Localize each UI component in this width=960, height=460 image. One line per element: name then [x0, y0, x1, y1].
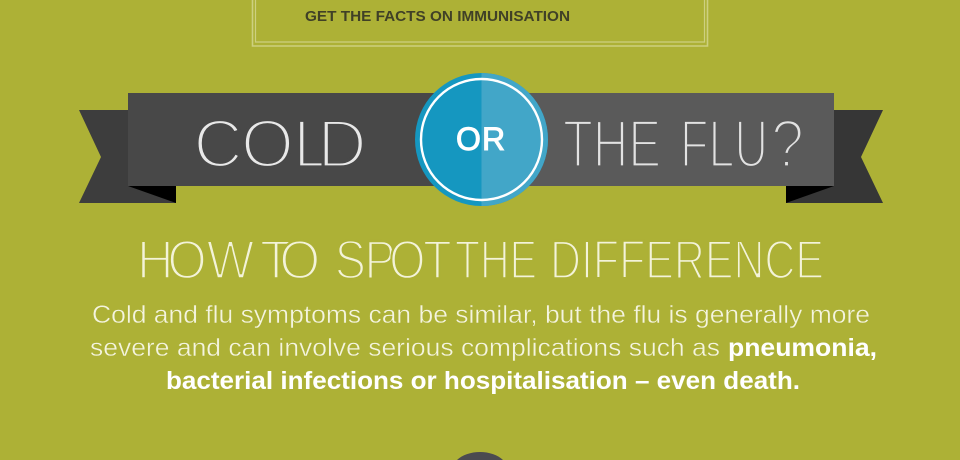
- heading: TO: [260, 230, 320, 291]
- OR label: OR: [456, 121, 505, 157]
- THE FLU? text: [563, 106, 804, 182]
- OR badge: [415, 73, 548, 206]
- top frame with subtitle: [252, 0, 708, 46]
- intro paragraph: [90, 301, 877, 395]
- paragraph line 2 bold: pneumonia,: [728, 334, 877, 362]
- THE FLU? text: THE: [563, 106, 661, 182]
- paragraph line 3 bold: bacterial infections or hospitalisation – even death.: [166, 367, 800, 395]
- heading: DIFFERENCE: [550, 228, 824, 290]
- ribbon fold left: [128, 186, 176, 203]
- THE FLU? text: FLU: [680, 106, 768, 182]
- COLD text: COLD: [194, 106, 367, 182]
- heading: SPOT: [335, 229, 452, 290]
- THE FLU? text: ?: [771, 106, 804, 182]
- ribbon tail right: [786, 110, 883, 203]
- paragraph line 1: Cold and flu symptoms can be similar, but the flu is generally more: [92, 301, 870, 329]
- ribbon band right: [481, 93, 834, 186]
- ribbon tail left: [79, 110, 176, 203]
- heading: THE: [455, 228, 537, 290]
- subtitle: GET THE FACTS ON IMMUNISATION: [305, 9, 570, 25]
- heading: [137, 228, 824, 291]
- paragraph line 2: severe and can involve serious complications such as: [90, 334, 720, 362]
- dark circle at bottom: [457, 452, 503, 460]
- heading: HOW: [137, 230, 254, 291]
- ribbon banner: [79, 93, 883, 203]
- ribbon band left: [128, 93, 482, 186]
- ribbon fold right: [786, 186, 834, 203]
